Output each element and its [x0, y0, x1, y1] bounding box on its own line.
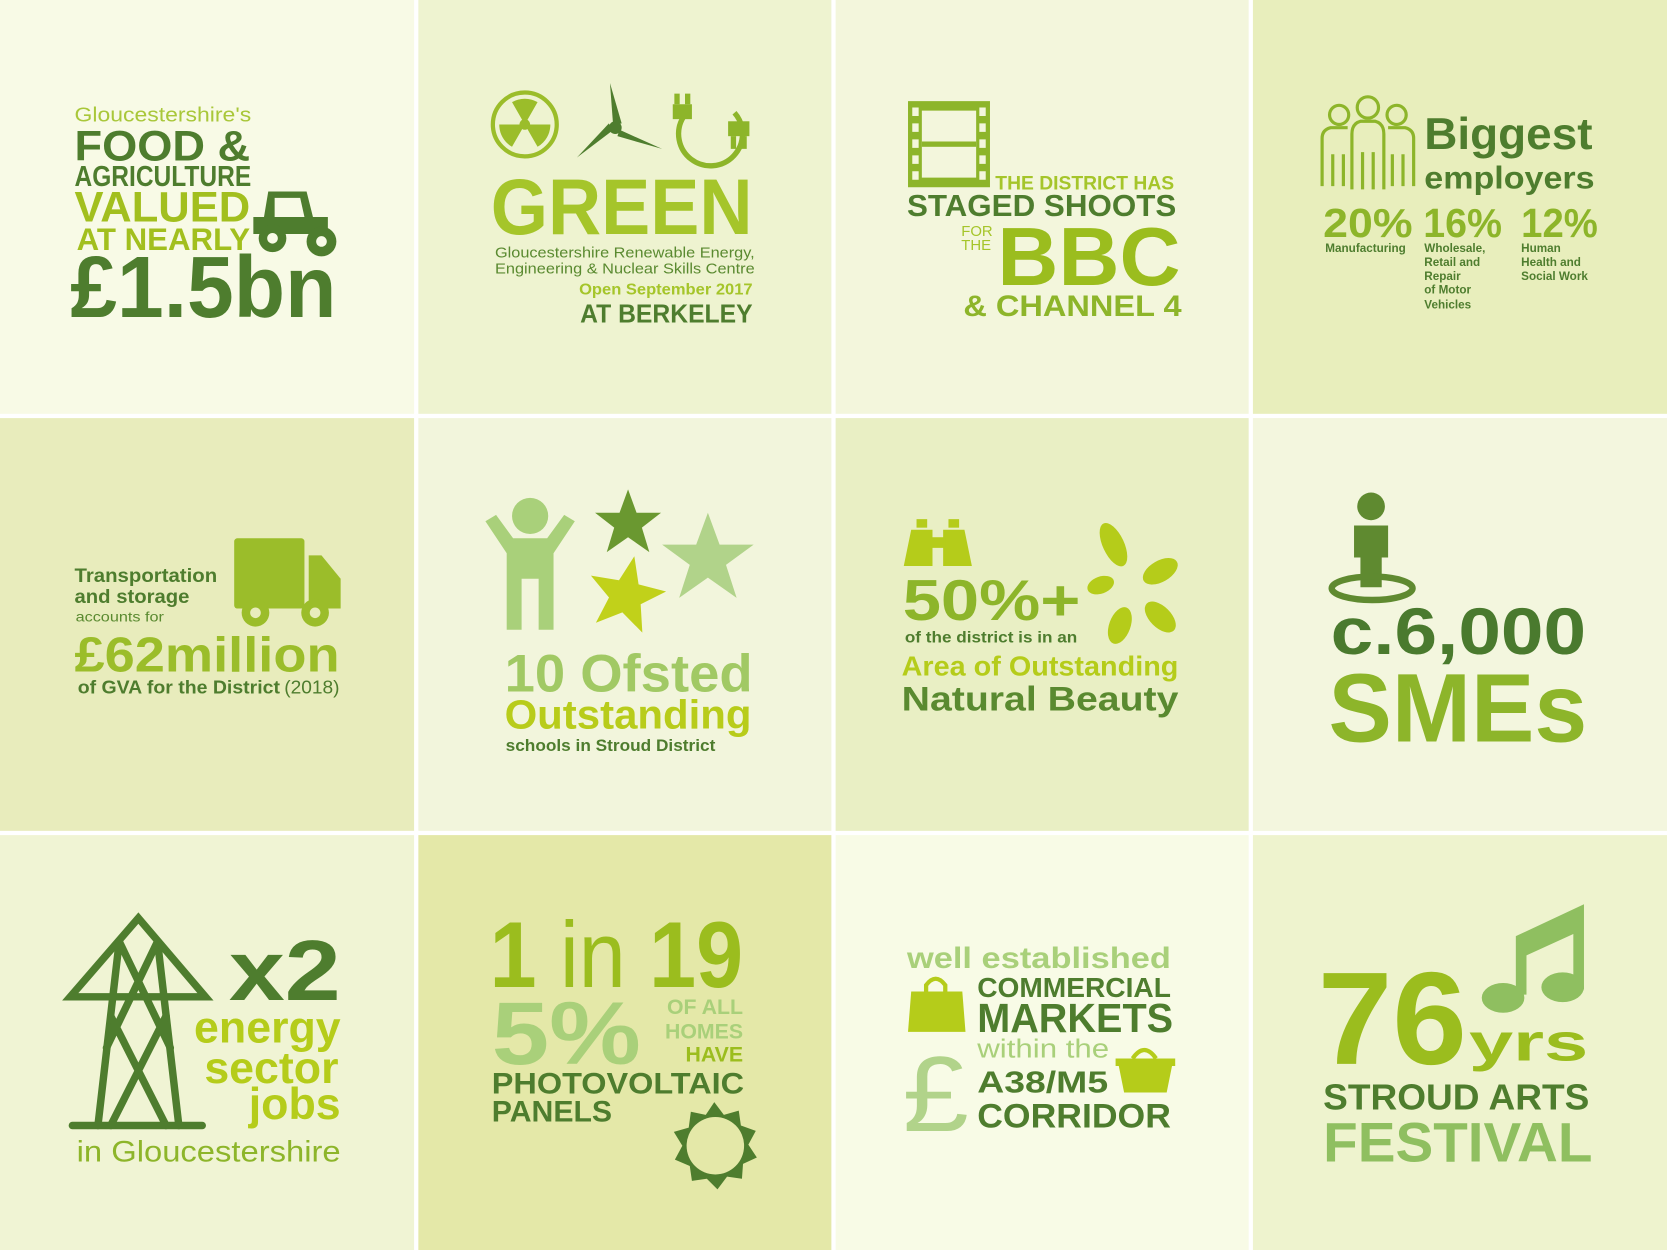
text: food agriculture: VALUED: [75, 183, 250, 231]
text: transportation: and storage: [75, 587, 189, 608]
text: photovoltaic: OF ALL: [667, 995, 743, 1019]
text: aonb: Area of Outstanding: [902, 651, 1178, 682]
text: photovoltaic: 1 in 19: [490, 902, 743, 1007]
text: aonb: [902, 569, 1178, 719]
text: bbc: THE DISTRICT HAS: [995, 173, 1174, 194]
text: employers: Human: [1521, 242, 1561, 255]
text: food agriculture: AT NEARLY: [77, 221, 250, 257]
text: bbc: BBC: [997, 210, 1181, 303]
text: aonb: 50%+: [903, 569, 1080, 633]
text: bbc: & CHANNEL 4: [963, 290, 1182, 323]
icon: wind turbine: [577, 83, 662, 157]
panel: green skills centre: [418, 0, 831, 414]
icon: person on location: [1332, 493, 1413, 600]
text: photovoltaic: PANELS: [492, 1095, 612, 1128]
text: markets: COMMERCIAL: [977, 972, 1171, 1003]
text: bbc: STAGED SHOOTS: [907, 188, 1176, 223]
text: employers: Health and: [1521, 256, 1581, 269]
text: food agriculture: [70, 104, 336, 336]
text: food agriculture: AGRICULTURE: [75, 161, 251, 193]
text: green: [491, 163, 755, 328]
icon: stars: [582, 489, 754, 636]
panel: photovoltaic: [418, 835, 831, 1250]
panel: arts festival: [1253, 835, 1667, 1250]
icon: sun: [674, 1102, 757, 1189]
text: food agriculture: FOOD &: [75, 123, 250, 171]
icon: flower petals: [1085, 519, 1182, 647]
text: photovoltaic: 5%: [492, 983, 641, 1083]
icon: shopping bag: [908, 979, 965, 1032]
text: energy jobs: [77, 924, 341, 1169]
text: bbc: THE: [961, 238, 991, 254]
text: energy jobs: x2: [229, 924, 341, 1019]
panel: commercial markets: [836, 835, 1249, 1250]
text: energy jobs: in Gloucestershire: [77, 1136, 341, 1169]
text: green: Open September 2017: [579, 282, 753, 299]
text: green: AT BERKELEY: [580, 300, 753, 328]
icon: truck: [234, 538, 341, 627]
text: transportation: £62million: [75, 628, 340, 682]
icon: music note: [1482, 904, 1584, 1013]
panel: natural beauty: [836, 418, 1249, 831]
text: bbc: [907, 173, 1182, 323]
panel: ofsted: [418, 418, 831, 831]
text: photovoltaic: PHOTOVOLTAIC: [492, 1068, 744, 1101]
panel: energy jobs: [0, 835, 414, 1250]
text: employers: Manufacturing: [1325, 242, 1406, 255]
text: employers: 20%: [1323, 200, 1413, 246]
text: markets: A38/M5: [977, 1065, 1108, 1100]
text: smes: c.6,000: [1331, 594, 1586, 668]
text: energy jobs: jobs: [248, 1080, 341, 1129]
icon: basket: [1116, 1050, 1175, 1093]
icon: people: [1322, 97, 1414, 189]
panel: smes: [1253, 418, 1667, 831]
text: food agriculture: £1.5bn: [70, 239, 336, 336]
text: energy jobs: energy: [194, 1004, 341, 1053]
text: markets: within the: [976, 1035, 1109, 1063]
icon: radiation: [493, 93, 557, 156]
text: aonb: Natural Beauty: [902, 681, 1178, 719]
text: employers: Repair: [1424, 270, 1461, 283]
panel: food & agriculture: [0, 0, 414, 414]
text: bbc: FOR: [961, 224, 993, 240]
text: employers: Retail and: [1424, 256, 1480, 269]
text: ofsted: 10 Ofsted: [505, 645, 753, 703]
panel: transportation: [0, 418, 414, 831]
icon: tractor: [253, 191, 336, 256]
text: energy jobs: sector: [204, 1044, 339, 1093]
text: employers: Social Work: [1521, 270, 1588, 283]
text: transportation: accounts for: [76, 608, 164, 624]
text: ofsted: schools in Stroud District: [506, 736, 716, 755]
icon: plug: [673, 94, 749, 166]
text: green: Engineering & Nuclear Skills Centre: [495, 261, 755, 277]
text: photovoltaic: [490, 902, 744, 1128]
text: transportation: of GVA for the District: [78, 678, 280, 698]
text: smes: [1328, 594, 1587, 762]
text: arts festival: STROUD ARTS: [1323, 1077, 1589, 1118]
text: photovoltaic: HOMES: [665, 1019, 743, 1043]
text: employers: 16%: [1423, 200, 1502, 246]
text: markets: well established: [906, 942, 1171, 975]
text: employers: of Motor: [1424, 284, 1471, 297]
text: transportation: [75, 566, 340, 698]
text: ofsted: Outstanding: [505, 692, 752, 738]
text: arts festival: yrs: [1469, 1014, 1588, 1073]
text: markets: £: [903, 1035, 969, 1154]
text: employers: Vehicles: [1424, 299, 1472, 312]
panel: biggest employers: [1253, 0, 1667, 414]
text: arts festival: 76: [1318, 945, 1467, 1092]
text: markets: MARKETS: [977, 995, 1173, 1041]
text: arts festival: [1318, 945, 1592, 1174]
text: green: GREEN: [491, 163, 753, 251]
text: smes: SMEs: [1328, 653, 1587, 762]
text: employers: 12%: [1521, 200, 1598, 246]
text: employers: [1323, 110, 1598, 312]
text: employers: Biggest: [1424, 110, 1593, 159]
text: photovoltaic: HAVE: [685, 1043, 743, 1067]
icon: child: [485, 498, 575, 630]
icon: binoculars: [904, 519, 972, 566]
text: employers: employers: [1424, 159, 1595, 195]
text: markets: [903, 942, 1173, 1154]
text: employers: Wholesale,: [1424, 242, 1485, 255]
text: ofsted: [505, 645, 753, 755]
icon: pylon: [70, 918, 205, 1126]
text: transportation: Transportation: [75, 566, 217, 587]
text: arts festival: FESTIVAL: [1323, 1112, 1592, 1174]
icon: film strip: [908, 101, 990, 187]
text: food agriculture: Gloucestershire's: [75, 104, 251, 126]
text: green: Gloucestershire Renewable Energy,: [495, 245, 755, 261]
text: transportation: (2018): [284, 678, 340, 698]
text: markets: CORRIDOR: [977, 1098, 1171, 1136]
panel: bbc shoots: [836, 0, 1249, 414]
text: aonb: of the district is in an: [905, 630, 1077, 647]
